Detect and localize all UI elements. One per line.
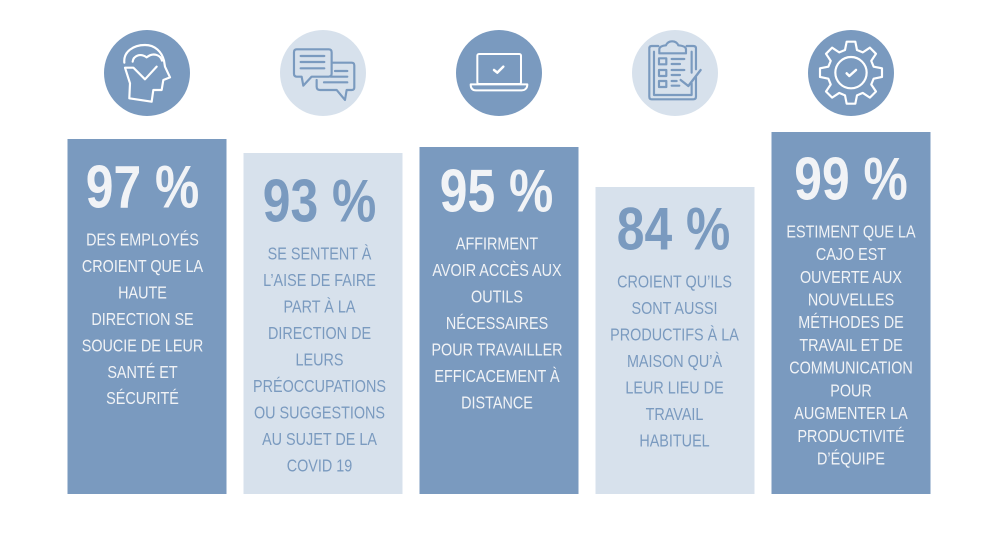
text: description 99 %: D’ÉQUIPE bbox=[817, 448, 885, 469]
text: description 97 %: SANTÉ ET bbox=[107, 361, 178, 382]
text: description 84 %: MAISON QU’À bbox=[627, 350, 722, 371]
text: description 84 % bbox=[610, 272, 739, 451]
text: description 93 %: LEURS bbox=[296, 350, 344, 370]
stat: 84 %: 84 % bbox=[617, 195, 730, 263]
stat: 95 %: 95 % bbox=[440, 157, 553, 225]
text: description 93 %: DIRECTION DE bbox=[268, 324, 371, 343]
text: description 99 %: NOUVELLES bbox=[808, 290, 894, 310]
icon: clipboard checklist bbox=[632, 30, 718, 116]
stat: 93 %: 93 % bbox=[263, 167, 376, 235]
icon: speech bubbles bbox=[280, 30, 366, 116]
text: description 93 %: COVID 19 bbox=[287, 456, 352, 476]
text: description 93 %: PART À LA bbox=[284, 296, 356, 317]
text: description 95 %: POUR TRAVAILLER bbox=[431, 340, 563, 360]
text: description 99 %: COMMUNICATION bbox=[789, 358, 913, 378]
text: description 95 %: EFFICACEMENT À bbox=[434, 365, 560, 386]
text: description 95 %: NÉCESSAIRES bbox=[446, 312, 548, 333]
text: description 93 % bbox=[253, 243, 386, 476]
panel: 99 % bbox=[772, 132, 930, 494]
icon: head with heart bbox=[104, 30, 190, 116]
text: description 97 %: CROIENT QUE LA bbox=[82, 257, 203, 276]
text: description 95 %: OUTILS bbox=[471, 287, 523, 307]
text: description 84 %: SONT AUSSI bbox=[631, 299, 718, 318]
text: description 95 %: DISTANCE bbox=[461, 393, 533, 413]
text: description 97 %: SÉCURITÉ bbox=[106, 387, 179, 408]
text: description 93 %: OU SUGGESTIONS bbox=[254, 403, 385, 423]
stat: 99 %: 99 % bbox=[794, 145, 908, 213]
text: description 95 %: AVOIR ACCÈS AUX bbox=[432, 259, 562, 280]
text: description 84 %: TRAVAIL bbox=[646, 405, 703, 424]
text: description 97 %: HAUTE bbox=[118, 283, 167, 303]
icon: gear with check bbox=[808, 30, 894, 116]
text: description 93 %: SE SENTENT À bbox=[268, 243, 371, 264]
text: description 99 %: AUGMENTER LA bbox=[794, 404, 908, 423]
stat: 97 %: 97 % bbox=[86, 153, 199, 221]
text: description 99 %: TRAVAIL ET DE bbox=[799, 336, 903, 355]
text: description 95 % bbox=[431, 234, 563, 413]
text: description 97 %: DES EMPLOYÉS bbox=[86, 229, 199, 250]
text: description 99 %: CAJO EST bbox=[816, 245, 886, 264]
panel: 93 % bbox=[244, 153, 402, 494]
text: description 99 %: OUVERTE AUX bbox=[800, 268, 902, 287]
text: description 99 %: ESTIMENT QUE LA bbox=[786, 222, 916, 242]
text: description 99 %: POUR bbox=[830, 381, 872, 401]
text: description 97 % bbox=[82, 229, 203, 408]
text: description 93 %: PRÉOCCUPATIONS bbox=[253, 375, 386, 396]
panel: 97 % bbox=[68, 139, 226, 494]
text: description 99 %: MÉTHODES DE bbox=[798, 311, 904, 332]
text: description 99 %: PRODUCTIVITÉ bbox=[797, 425, 905, 446]
panel: 95 % bbox=[420, 147, 578, 494]
text: description 97 %: DIRECTION SE bbox=[91, 310, 194, 329]
text: description 84 %: HABITUEL bbox=[639, 431, 710, 451]
panel: 84 % bbox=[596, 187, 754, 494]
text: description 99 % bbox=[786, 222, 916, 469]
text: description 93 %: AU SUJET DE LA bbox=[262, 430, 377, 449]
icon: laptop with check bbox=[456, 30, 542, 116]
text: description 84 %: CROIENT QU’ILS bbox=[617, 272, 732, 292]
text: description 84 %: PRODUCTIFS À LA bbox=[610, 324, 739, 345]
text: description 95 %: AFFIRMENT bbox=[456, 234, 538, 254]
text: description 93 %: L’AISE DE FAIRE bbox=[263, 271, 376, 290]
text: description 84 %: LEUR LIEU DE bbox=[625, 378, 724, 398]
text: description 97 %: SOUCIE DE LEUR bbox=[82, 336, 203, 356]
